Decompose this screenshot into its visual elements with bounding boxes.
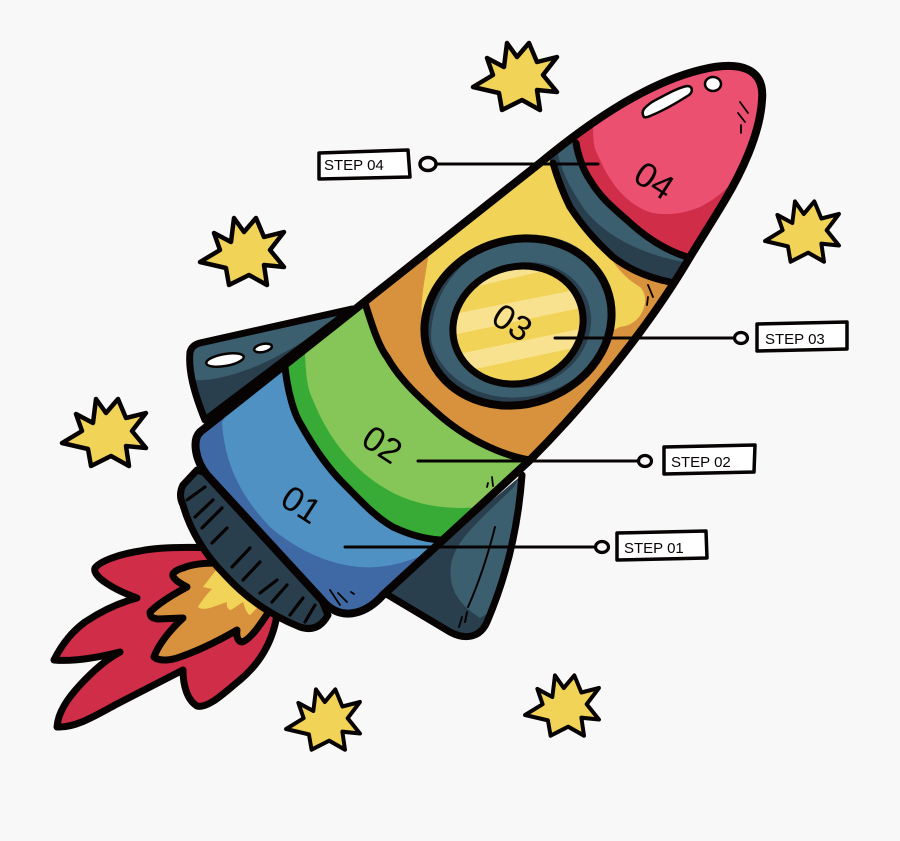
label box 03 bbox=[757, 322, 847, 351]
nozzle: ribs bbox=[187, 487, 315, 622]
section 03: orange and yellow bbox=[368, 160, 668, 456]
porthole: window outline bbox=[436, 248, 600, 402]
nose: highlight dot bbox=[705, 77, 721, 91]
callout: step 02 bbox=[418, 445, 755, 474]
callout: step 01 bbox=[345, 531, 707, 560]
leader dot 02 bbox=[638, 456, 652, 466]
star: right bbox=[765, 201, 839, 262]
porthole: window glass bbox=[436, 248, 600, 402]
porthole bbox=[420, 234, 616, 410]
leader dot 03 bbox=[734, 332, 748, 344]
flame: red outer bbox=[54, 547, 277, 727]
body: outline bbox=[196, 66, 762, 614]
label box 01 bbox=[617, 531, 707, 560]
left fin: light panel bbox=[193, 316, 337, 380]
body: section dividers bbox=[285, 143, 687, 540]
rocket body bbox=[192, 62, 766, 618]
porthole: ring outline bbox=[401, 212, 635, 432]
left fin: highlight large bbox=[205, 351, 245, 369]
number 04: 04 bbox=[627, 154, 681, 208]
label text 04: STEP 04 bbox=[324, 157, 384, 174]
label text 02: STEP 02 bbox=[671, 454, 731, 471]
flame: yellow core bbox=[198, 569, 262, 615]
leader line 03 bbox=[555, 336, 735, 340]
right fin: base bbox=[383, 475, 522, 637]
number 02: 02 bbox=[355, 418, 409, 472]
engine nozzle bbox=[180, 470, 328, 628]
left fin bbox=[185, 300, 352, 420]
star: bottom right bbox=[525, 675, 599, 736]
leader line 02 bbox=[418, 460, 638, 462]
right fin bbox=[383, 470, 530, 637]
leader dot 01 bbox=[596, 542, 608, 552]
right fin: light panel bbox=[450, 480, 518, 618]
section 01: blue bbox=[200, 372, 434, 610]
label box 04 bbox=[319, 150, 410, 179]
section 04: red nose bbox=[576, 70, 758, 254]
star: top bbox=[473, 43, 557, 110]
number 01: 01 bbox=[274, 478, 328, 532]
label text 03: STEP 03 bbox=[765, 331, 825, 348]
body: small ticks bbox=[330, 102, 748, 605]
left fin: highlight small bbox=[253, 342, 273, 354]
number 03: 03 bbox=[485, 296, 539, 350]
porthole: window stripes bbox=[456, 270, 579, 369]
section 02: green bbox=[288, 308, 522, 536]
star: bottom left bbox=[286, 689, 360, 750]
collar band bbox=[550, 142, 684, 279]
porthole: ring bbox=[401, 212, 635, 432]
nose: highlight streak bbox=[643, 86, 692, 117]
nozzle: shell bbox=[180, 470, 328, 628]
rocket infographic bbox=[50, 40, 849, 752]
star: left bbox=[62, 399, 146, 466]
left fin: outline bbox=[190, 309, 352, 420]
leader line 04 bbox=[436, 162, 598, 166]
flame: orange inner bbox=[150, 563, 270, 660]
star: upper left bbox=[200, 218, 284, 285]
leader line 01 bbox=[345, 546, 595, 548]
right fin: detail lines bbox=[459, 527, 495, 627]
flame bbox=[54, 547, 277, 727]
porthole: window shade bbox=[435, 243, 609, 407]
label box 02 bbox=[664, 445, 755, 474]
label text 01: STEP 01 bbox=[624, 540, 684, 557]
left fin: base bbox=[190, 309, 352, 420]
porthole: ring light bbox=[431, 235, 608, 398]
body colour sections bbox=[200, 70, 758, 610]
callout: step 04 bbox=[319, 150, 598, 179]
right fin: outline bbox=[383, 475, 522, 637]
callout: step 03 bbox=[555, 322, 847, 351]
leader dot 04 bbox=[420, 158, 436, 170]
